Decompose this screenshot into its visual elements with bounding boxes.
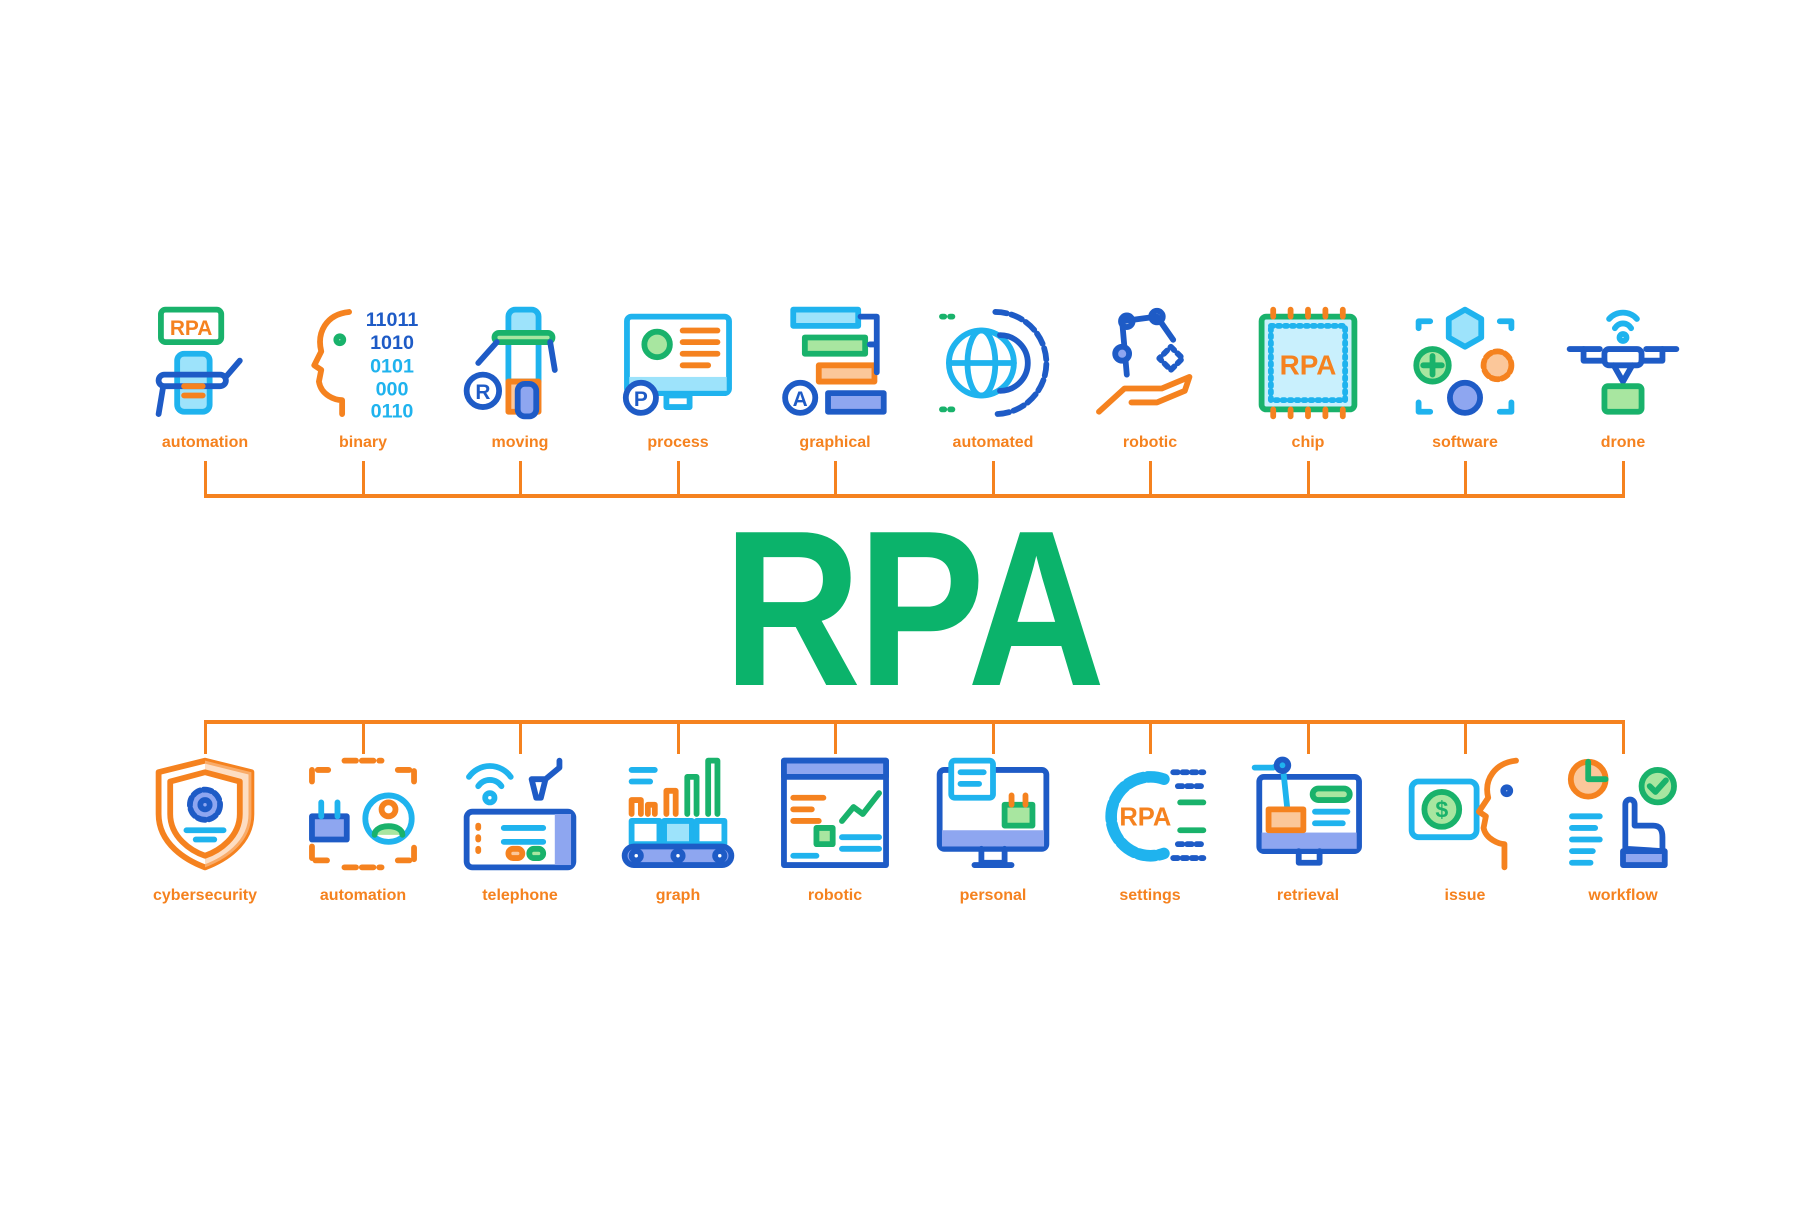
label: automation — [320, 887, 406, 904]
label: graph — [656, 887, 700, 904]
column: software — [1413, 306, 1514, 494]
column: automation (bottom) — [309, 724, 417, 904]
icon: monitor with gear — [622, 314, 732, 416]
icon: globe and gear — [939, 309, 1050, 417]
icon: RPA gear: RPA — [1119, 804, 1171, 832]
column: issue — [1408, 724, 1519, 904]
icon: graphical flow — [782, 306, 887, 416]
icon: robotic arm on hand — [1096, 308, 1192, 415]
icon: head with binary: 000 — [376, 378, 408, 400]
label: chip — [1292, 434, 1324, 451]
column: binary — [311, 309, 418, 494]
column: personal — [936, 724, 1050, 904]
column: telephone — [464, 724, 576, 904]
label: binary — [339, 434, 387, 451]
icon: monitor with chat — [936, 758, 1050, 868]
label: automation — [162, 434, 248, 451]
icon: head with binary: 1010 — [370, 332, 414, 354]
connector: top line — [204, 494, 1625, 498]
label: issue — [1445, 887, 1485, 904]
column: process — [622, 314, 732, 494]
icon: monitor with robot arm — [1252, 756, 1362, 866]
icon: RPA gear — [1105, 769, 1206, 862]
column: graph — [622, 724, 734, 904]
icon: dollar bubble and head — [1408, 758, 1519, 870]
column: robotic (top) — [1096, 308, 1192, 494]
icon: robot with RPA bubble — [156, 306, 243, 417]
icon: automation frame — [309, 758, 417, 870]
icon: RPA chip — [1258, 306, 1358, 420]
label: personal — [960, 887, 1026, 904]
column: robotic (bottom) — [781, 724, 889, 904]
column: settings — [1105, 724, 1206, 904]
icon: robot with RPA bubble: RPA — [170, 317, 212, 340]
column: cybersecurity — [153, 724, 257, 904]
label: moving — [492, 434, 548, 451]
label: software — [1432, 434, 1498, 451]
icon: monitor with gear: P — [634, 388, 648, 411]
label: retrieval — [1277, 887, 1339, 904]
icon: moving robot: R — [475, 381, 490, 404]
label: settings — [1119, 887, 1181, 904]
icon: drone with package — [1566, 310, 1680, 415]
icon: head with binary: 0101 — [370, 355, 414, 377]
icon: shield with gear — [156, 758, 254, 870]
icon: software modules — [1413, 306, 1514, 416]
icon: workflow with hand and check — [1568, 758, 1677, 868]
connector: bottom line — [204, 720, 1625, 724]
icon: dollar bubble and head: $ — [1435, 796, 1448, 822]
label: automated — [953, 434, 1033, 451]
icon: web page with chip — [781, 758, 889, 868]
column: graphical — [782, 306, 887, 494]
label: robotic — [808, 887, 862, 904]
label: cybersecurity — [153, 887, 257, 904]
icon: moving robot — [464, 306, 558, 420]
label: robotic — [1123, 434, 1177, 451]
column: automated — [939, 309, 1050, 494]
label: workflow — [1588, 887, 1658, 904]
icon: RPA chip: RPA — [1280, 350, 1336, 381]
icon: graph on conveyor — [622, 758, 734, 868]
label: process — [647, 434, 709, 451]
column: drone — [1566, 310, 1680, 494]
column: automation (top) — [156, 306, 248, 494]
icon: head with binary: 11011 — [366, 309, 418, 331]
column: workflow — [1568, 724, 1677, 904]
label: graphical — [799, 434, 871, 451]
icon: head with binary — [311, 309, 418, 421]
column: retrieval — [1252, 724, 1362, 904]
column: chip — [1258, 306, 1358, 494]
column: moving — [464, 306, 558, 494]
tick — [204, 461, 207, 496]
label: drone — [1601, 434, 1645, 451]
label: telephone — [482, 887, 558, 904]
title: RPA: RPA — [723, 485, 1102, 733]
icon: graphical flow: A — [793, 388, 808, 411]
icon: tablet with wifi — [464, 758, 576, 870]
